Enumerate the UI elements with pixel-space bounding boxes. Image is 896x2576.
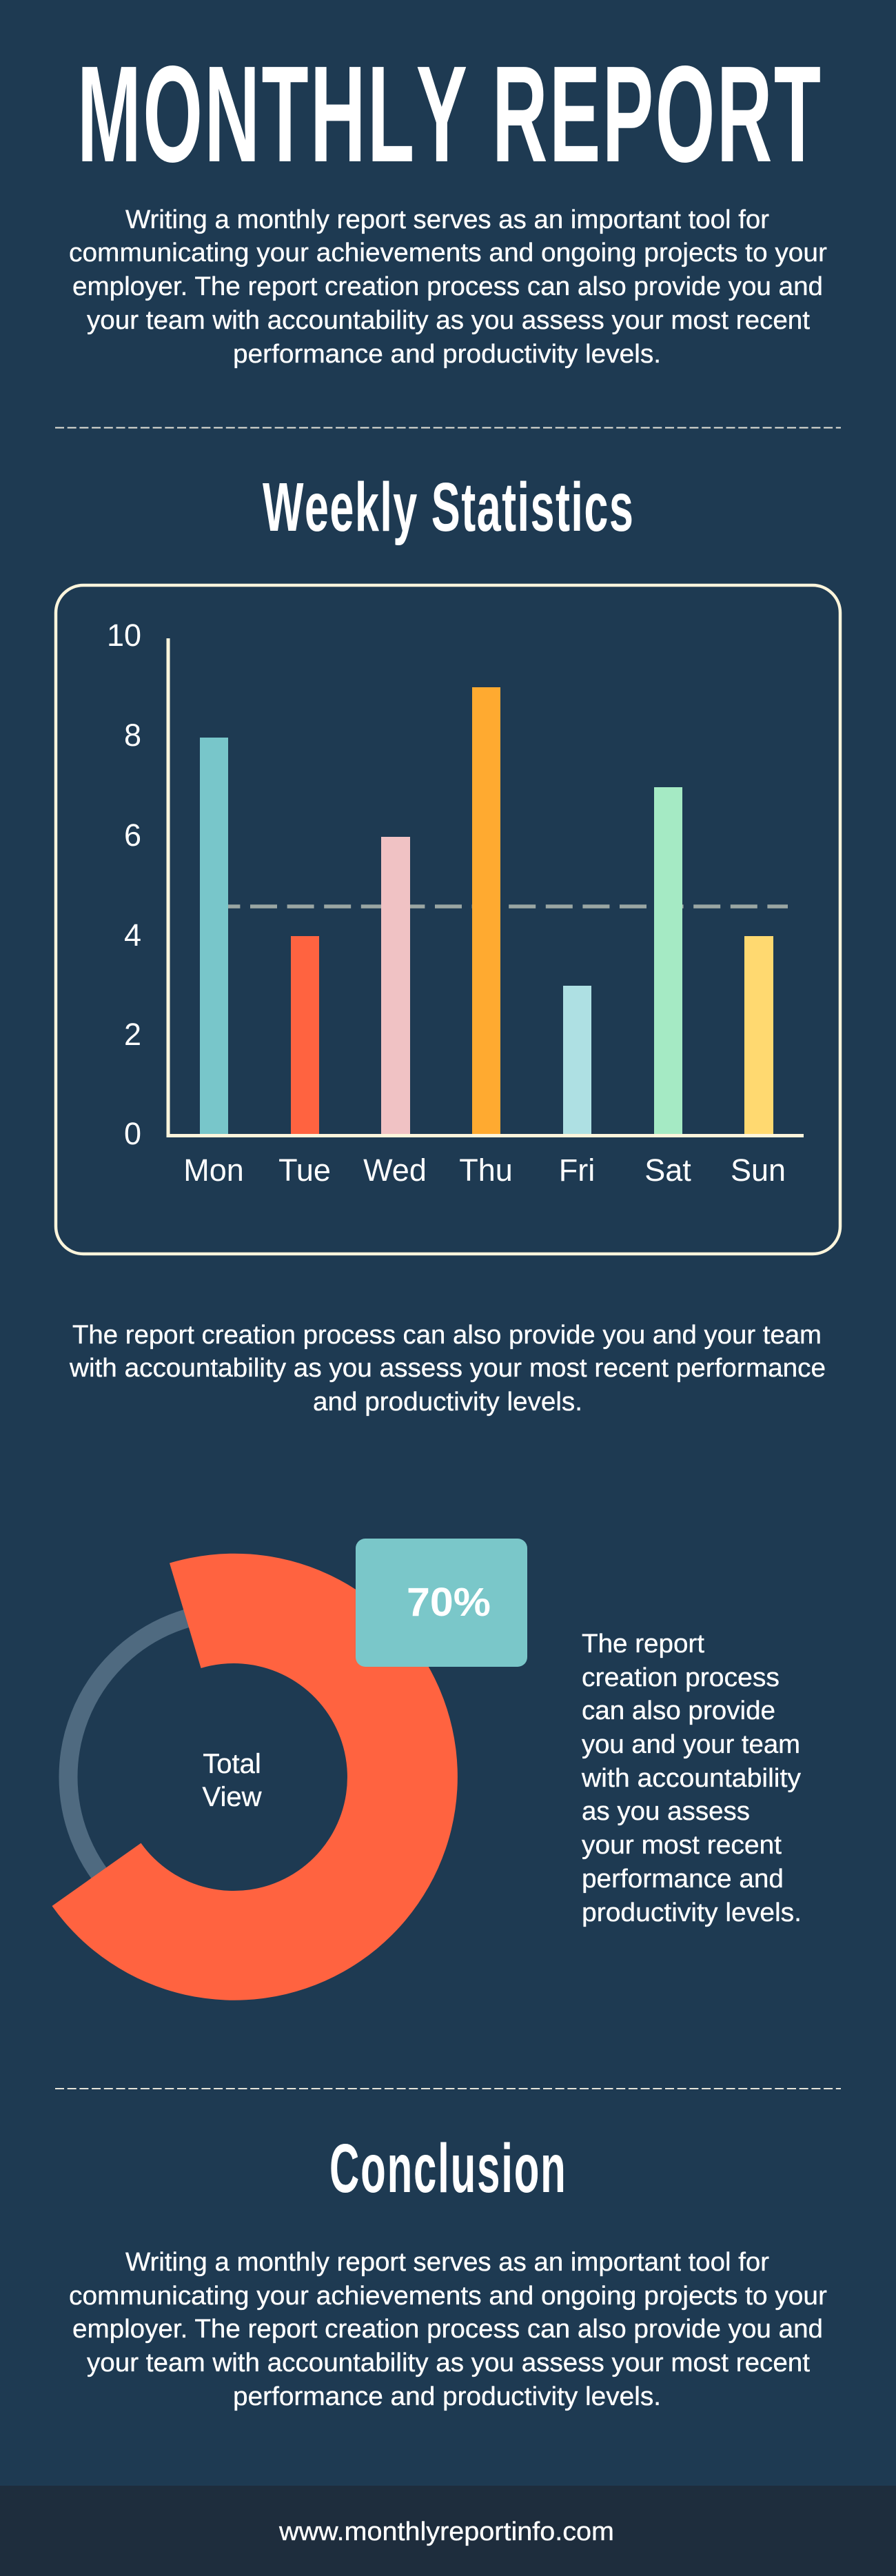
intro text block: your team with accountability as you assess your most recent [87,306,810,335]
callout: 70%: 70% [407,1580,491,1625]
doughnut description text: can also provide [582,1696,775,1725]
track ring [68,1612,399,1943]
doughnut description text: as you assess [582,1797,750,1826]
intro text block: communicating your achievements and ongoing projects to your [69,239,827,267]
doughnut chart [52,1554,458,2000]
doughnut description text: productivity levels. [582,1898,802,1927]
bar: Thu [472,687,500,1135]
doughnut description text [581,1630,802,1927]
heading: conclusion: Conclusion [329,2130,567,2207]
callout: 70% [356,1539,527,1667]
chart description text: with accountability as you assess your most recent performance [69,1354,826,1383]
y-axis labels: 6 [124,818,141,853]
title: MONTHLY REPORT [77,38,822,191]
intro text block: employer. The report creation process can also provide you and [72,272,823,301]
x-axis labels: Fri [559,1153,595,1188]
doughnut description text: performance and [582,1865,784,1894]
chart description text: The report creation process can also provide you and your team [72,1321,822,1350]
70% arc [52,1554,458,2000]
x-axis labels: Sun [731,1153,786,1188]
x-axis labels: Sat [644,1153,691,1188]
center label [203,1749,262,1812]
chart axes [168,638,804,1136]
panel: bar chart [56,585,840,1254]
footer [0,2486,896,2576]
intro text block [69,205,827,369]
doughnut description text: The report [582,1630,704,1659]
y-axis labels: 0 [124,1116,141,1151]
bar: Wed [381,837,410,1135]
conclusion text block: Writing a monthly report serves as an important tool for [125,2248,769,2277]
conclusion text block: employer. The report creation process can also provide you and [72,2315,823,2344]
y-axis labels: 2 [124,1017,141,1052]
x-axis labels [183,1153,786,1188]
x-axis labels: Mon [183,1153,244,1188]
bar: Sat [654,787,682,1135]
intro text block: Writing a monthly report serves as an important tool for [125,205,769,234]
y-axis labels: 8 [124,718,141,753]
center label: Total [203,1749,261,1779]
conclusion text block: performance and productivity levels. [233,2382,661,2411]
y-axis labels: 4 [124,917,141,953]
doughnut description text: you and your team [582,1730,800,1759]
center label: View [203,1782,262,1812]
y-axis labels: 10 [107,618,141,653]
bar: Fri [563,986,591,1135]
doughnut description text: creation process [582,1663,780,1692]
conclusion text block [69,2248,827,2411]
conclusion text block: communicating your achievements and ongoing projects to your [69,2282,827,2311]
heading: weekly statistics: Weekly Statistics [263,468,634,546]
x-axis labels: Thu [459,1153,513,1188]
bar: Sun [744,936,773,1135]
average dashed line [213,904,788,909]
doughnut description text: with accountability [581,1764,801,1793]
chart description text: and productivity levels. [313,1388,582,1417]
x-axis labels: Tue [278,1153,331,1188]
bar: Mon [200,738,228,1135]
bar: Tue [291,936,319,1135]
x-axis labels: Wed [363,1153,427,1188]
doughnut description text: your most recent [582,1831,782,1860]
footer: www.monthlyreportinfo.com [278,2517,614,2546]
y-axis labels [107,618,141,1151]
conclusion text block: your team with accountability as you assess your most recent [87,2349,810,2377]
chart description text [69,1321,826,1417]
intro text block: performance and productivity levels. [233,340,661,369]
